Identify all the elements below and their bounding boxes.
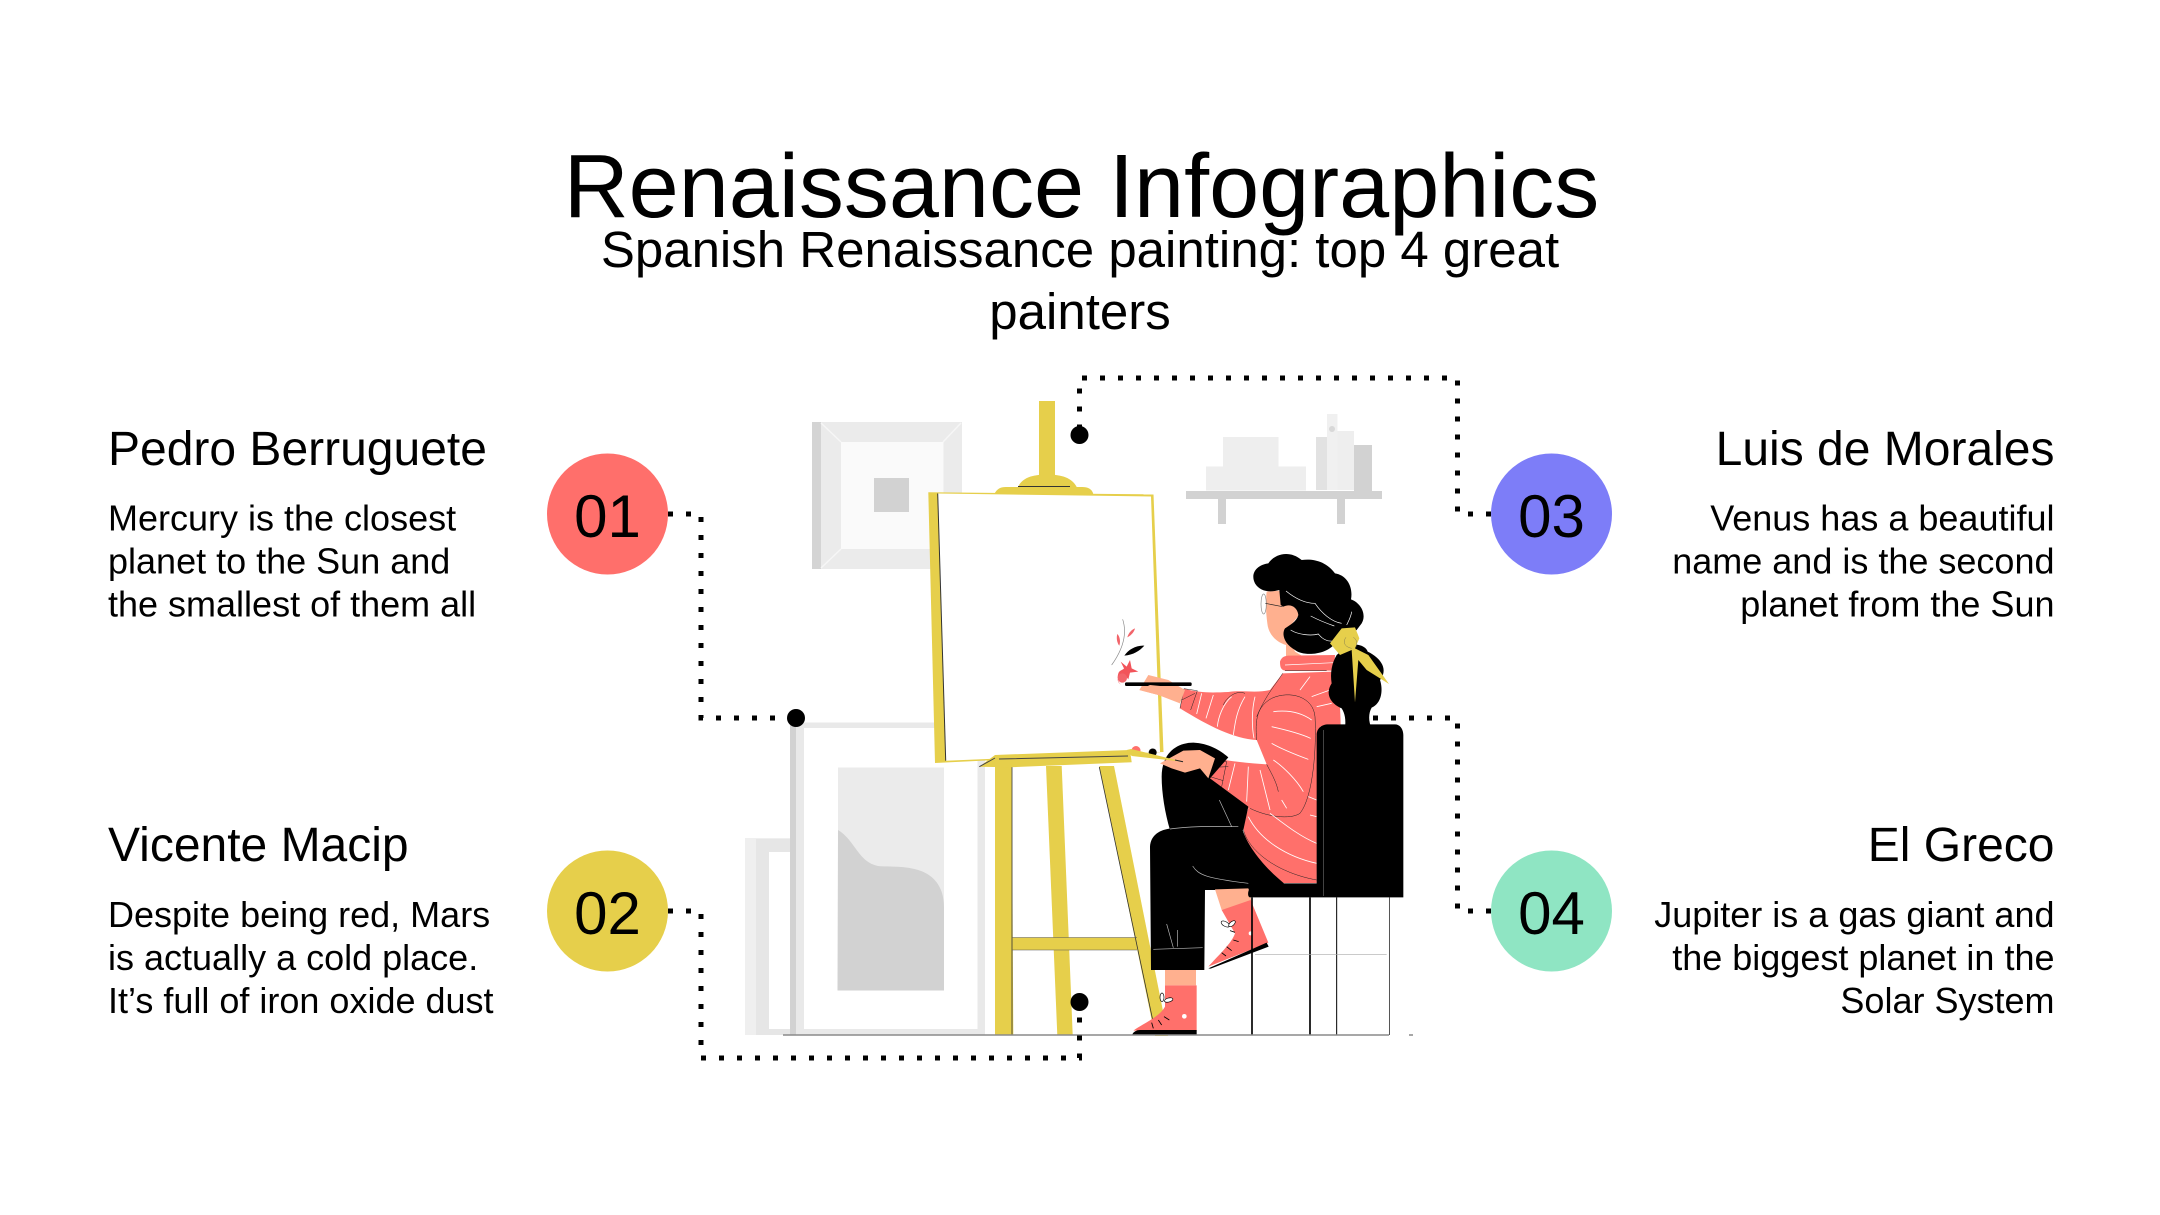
text block: Luis de Morales: name and is the second: [1672, 540, 2054, 582]
easel mast and clamp: [994, 401, 1093, 494]
raised knee: [1162, 743, 1248, 830]
chair: [1248, 724, 1403, 1035]
back foot: [1208, 888, 1269, 969]
badge 01: [547, 454, 668, 574]
large leaning frame: [790, 722, 985, 1035]
front foot: [1132, 970, 1197, 1035]
hair: [1253, 554, 1364, 654]
badge 04: [1491, 850, 1612, 972]
collar: [1280, 655, 1335, 671]
text block: Vicente Macip: It’s full of iron oxide dust: [108, 980, 494, 1021]
title: Renaissance Infographics: [564, 137, 1599, 237]
ponytail: [1329, 645, 1384, 728]
text block: Pedro Berruguete: Pedro Berruguete: [108, 423, 487, 476]
text block: Vicente Macip: Vicente Macip: [108, 819, 409, 872]
illustration: painter at easel: [745, 401, 1413, 1036]
text block: Luis de Morales: [1672, 423, 2054, 624]
text block: Vicente Macip: is actually a cold place.: [108, 937, 478, 978]
connector 02: [668, 911, 1088, 1058]
connector 03: [1070, 378, 1491, 514]
badge 04: 04: [1518, 880, 1585, 947]
text block: El Greco: Solar System: [1840, 980, 2054, 1021]
badge 02: [547, 850, 668, 972]
text block: Luis de Morales: planet from the Sun: [1740, 584, 2054, 624]
badge 03: [1491, 454, 1612, 574]
lower hand and palette: [1127, 746, 1215, 778]
easel ledge: [979, 750, 1132, 767]
text block: El Greco: [1654, 819, 2054, 1021]
connector 04: [1373, 718, 1491, 911]
hair ribbon: [1330, 627, 1389, 702]
text block: El Greco: El Greco: [1868, 819, 2054, 872]
ground line: [783, 1034, 1413, 1036]
text block: Luis de Morales: Luis de Morales: [1716, 423, 2054, 476]
blank canvas: [928, 492, 1164, 763]
subtitle: [601, 221, 1559, 340]
text block: Pedro Berruguete: [108, 423, 487, 624]
lower body and chair: [1132, 724, 1403, 1035]
upper hand with brush: [1125, 675, 1192, 703]
text block: El Greco: Jupiter is a gas giant and: [1654, 894, 2054, 935]
text block: Pedro Berruguete: Mercury is the closest: [108, 498, 456, 538]
thigh and trouser leg: [1150, 826, 1284, 970]
text block: El Greco: the biggest planet in the: [1672, 937, 2054, 978]
small leaning frame: [745, 838, 796, 1035]
easel legs: [995, 766, 1168, 1036]
hair highlights: [1286, 591, 1352, 641]
subtitle: Spanish Renaissance painting: top 4 great: [601, 221, 1559, 278]
text block: Vicente Macip: Despite being red, Mars: [108, 894, 490, 935]
badge 01: 01: [574, 483, 641, 550]
wall picture frame: [812, 422, 962, 569]
badge 02: 02: [574, 880, 641, 947]
painted flower: [1112, 619, 1144, 685]
text block: Pedro Berruguete: the smallest of them all: [108, 584, 476, 624]
subtitle: painters: [989, 283, 1171, 340]
woman painter: [1125, 554, 1389, 883]
head details: [1253, 554, 1389, 728]
glasses: [1261, 594, 1283, 614]
neck and face: [1266, 591, 1303, 657]
connector 01: [668, 514, 805, 727]
text block: Pedro Berruguete: planet to the Sun and: [108, 540, 450, 582]
badge 03: 03: [1518, 483, 1585, 550]
text block: Luis de Morales: Venus has a beautiful: [1710, 498, 2054, 538]
text block: Vicente Macip: [108, 819, 494, 1021]
shelf with books: [1186, 414, 1382, 524]
sweater: [1180, 672, 1341, 883]
